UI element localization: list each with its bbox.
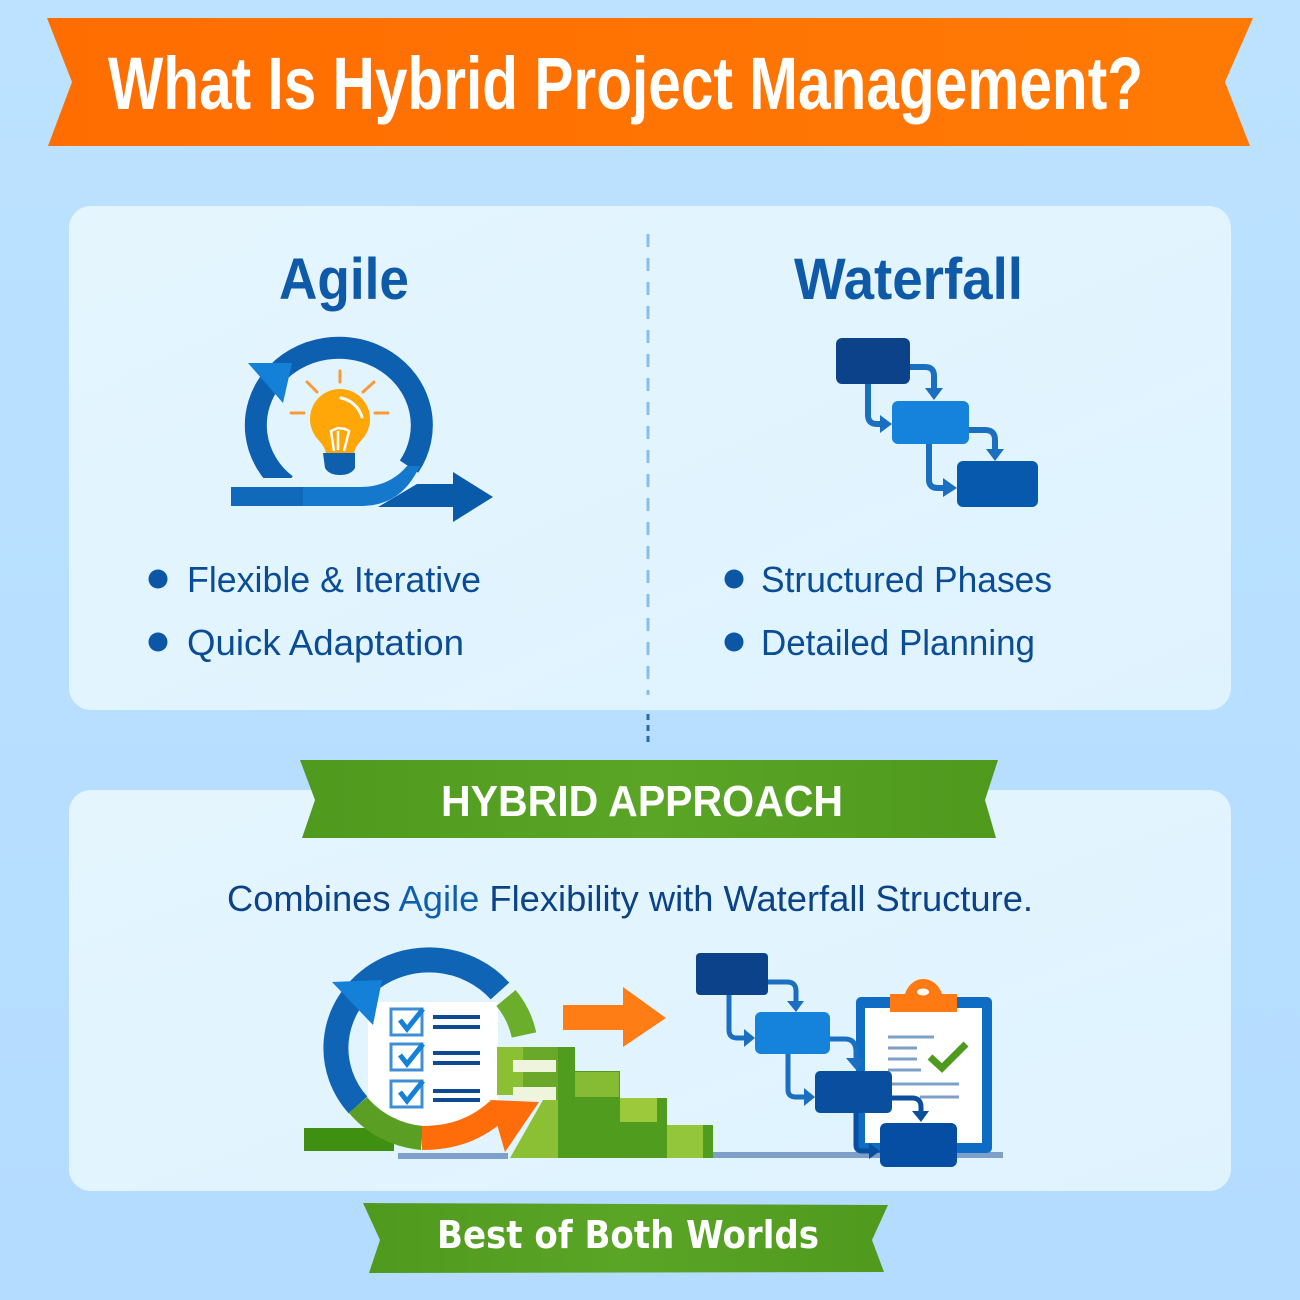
list: waterfall traits: Detailed Planning bbox=[761, 622, 1035, 663]
list: agile traits: Quick Adaptation bbox=[187, 622, 464, 663]
list: agile traits bbox=[148, 559, 481, 663]
green steps bbox=[497, 1047, 713, 1158]
clipboard bbox=[856, 979, 992, 1153]
flow connectors bbox=[729, 982, 856, 1097]
icon: waterfall flow bbox=[836, 338, 1038, 507]
title banner bbox=[47, 18, 1253, 146]
ribbon: hybrid approach: HYBRID APPROACH bbox=[441, 777, 843, 826]
ribbon: best of both worlds bbox=[363, 1203, 888, 1273]
heading: agile: Agile bbox=[279, 247, 409, 312]
list: waterfall traits bbox=[724, 559, 1052, 663]
hybrid description: Combines Agile Flexibility with Waterfall Structure. bbox=[227, 878, 1033, 919]
ribbon: best of both worlds: Best of Both Worlds bbox=[437, 1213, 819, 1257]
ribbon: hybrid approach bbox=[300, 760, 998, 838]
icon: hybrid waterfall flow and clipboard bbox=[696, 953, 1003, 1167]
orange arrow bbox=[563, 987, 666, 1047]
icon: hybrid agile loop and green steps bbox=[304, 960, 713, 1159]
panel: hybrid approach bbox=[69, 790, 1231, 1191]
document checklist bbox=[368, 1002, 498, 1127]
connector bbox=[646, 714, 650, 745]
list: agile traits: Flexible & Iterative bbox=[187, 559, 481, 600]
heading: waterfall: Waterfall bbox=[794, 247, 1023, 312]
panel: agile vs waterfall bbox=[69, 206, 1231, 710]
list: waterfall traits: Structured Phases bbox=[761, 559, 1052, 600]
icon: agile loop with light bulb bbox=[231, 348, 493, 522]
flow boxes bbox=[696, 953, 957, 1167]
